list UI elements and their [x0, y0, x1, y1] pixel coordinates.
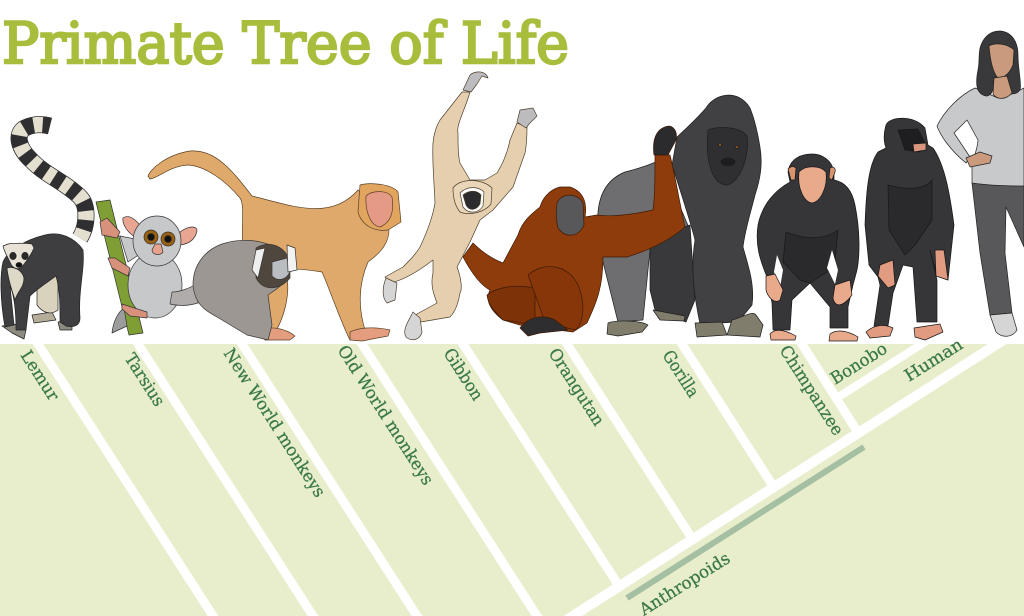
species labels: Human [901, 335, 967, 386]
human shoe [990, 313, 1017, 336]
species labels: New World monkeys [219, 345, 329, 501]
orangutan hand on gorilla [653, 126, 676, 155]
gorilla rear feet [607, 321, 648, 336]
icon: bonobo [865, 118, 954, 340]
gorilla rear body [598, 160, 690, 322]
species labels [16, 335, 967, 616]
icon: gorilla [598, 95, 763, 337]
icon: chimpanzee [757, 154, 859, 341]
icon: human [937, 31, 1024, 336]
species labels: Gibbon [439, 345, 487, 405]
lemur head [3, 243, 34, 269]
lemur body [1, 234, 83, 330]
icon: marmoset [170, 240, 297, 340]
icon: lemur [1, 125, 86, 339]
gorilla front body [672, 95, 761, 324]
icon: gibbon [383, 72, 537, 340]
species labels: Tarsius [120, 350, 168, 410]
lemur tail [19, 125, 86, 238]
panel: phylogenetic tree [0, 330, 1024, 616]
species labels: Bonobo [827, 339, 891, 389]
lemur feet [32, 312, 56, 323]
human hand [966, 152, 992, 167]
anthropoids bar [627, 447, 864, 598]
icon: macaque (old world monkey) [148, 151, 401, 341]
icon: tarsius [96, 200, 197, 335]
human face and neck [989, 44, 1014, 78]
tree branches [29, 330, 1019, 616]
lemur cream belly [37, 272, 58, 313]
tree background [0, 344, 1024, 616]
human trousers [972, 183, 1024, 315]
species labels: Lemur [16, 347, 63, 406]
species labels: Chimpanzee [775, 342, 847, 439]
title: Primate Tree of Life [2, 11, 569, 77]
human sweater [937, 88, 1024, 186]
species labels: Orangutan [544, 345, 608, 430]
human hair [977, 31, 1021, 96]
icon: orangutan [463, 126, 685, 336]
species labels: Gorilla [658, 347, 703, 401]
species labels: Old World monkeys [333, 342, 437, 489]
